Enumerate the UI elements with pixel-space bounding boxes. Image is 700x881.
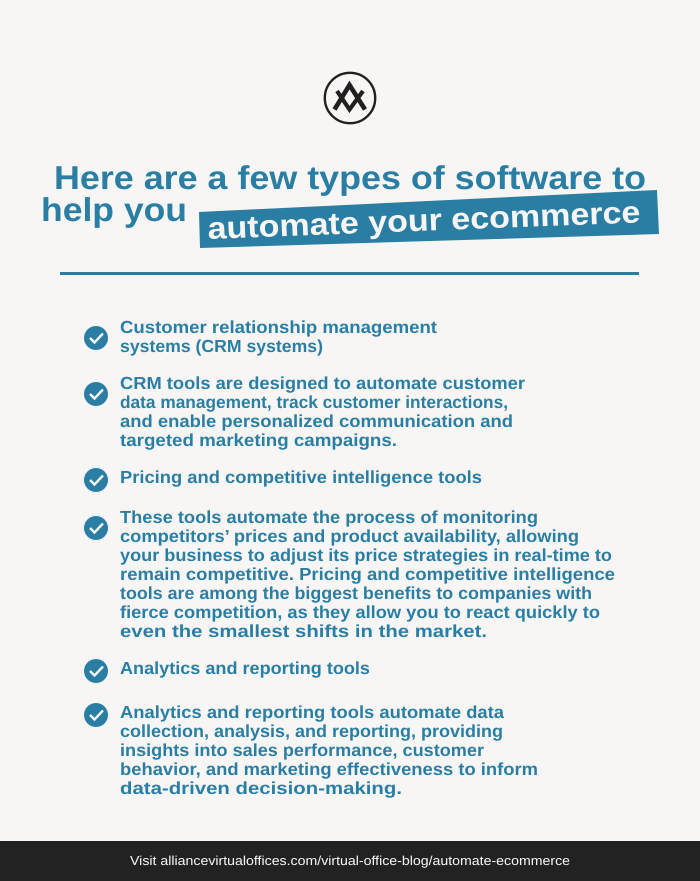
title — [41, 159, 646, 228]
icon: logo — [325, 73, 375, 123]
footer bar — [0, 841, 700, 881]
list item: pricing description: These tools automate the process of monitoring — [120, 507, 538, 527]
list item: pricing heading — [84, 467, 482, 492]
list item: CRM description: targeted marketing campaigns. — [120, 430, 397, 450]
list item: CRM description: CRM tools are designed to automate customer — [120, 373, 525, 393]
list item: analytics description: Analytics and reporting tools automate data — [120, 702, 504, 722]
list item: analytics description: insights into sales performance, customer — [120, 740, 484, 760]
list item: pricing description: your business to adjust its price strategies in real-time to — [120, 545, 612, 565]
list item: pricing heading: Pricing and competitive intelligence tools — [120, 467, 482, 487]
title: Here are a few types of software to — [54, 159, 646, 196]
list item: analytics description — [84, 702, 538, 798]
list item: analytics description: collection, analysis, and reporting, providing — [120, 721, 503, 741]
list item: CRM heading: Customer relationship management — [120, 317, 437, 337]
list item: analytics description: data-driven decision-making. — [120, 778, 402, 798]
list item: pricing description: competitors’ prices and product availability, allowing — [120, 526, 579, 546]
list item: CRM heading: systems (CRM systems) — [120, 336, 323, 356]
list item: CRM heading — [84, 317, 437, 356]
highlight banner: automate your ecommerce — [207, 194, 641, 246]
list item: pricing description — [84, 507, 615, 641]
footer bar: Visit alliancevirtualoffices.com/virtual-office-blog/automate-ecommerce — [130, 853, 570, 868]
list item: analytics description: behavior, and marketing effectiveness to inform — [120, 759, 538, 779]
list item: CRM description: data management, track customer interactions, — [120, 392, 508, 412]
list item: pricing description: tools are among the biggest benefits to companies with — [120, 583, 592, 603]
list item: CRM description: and enable personalized communication and — [120, 411, 513, 431]
title: help you — [41, 191, 187, 228]
list item: pricing description: remain competitive. Pricing and competitive intelligence — [120, 564, 615, 584]
list item: CRM description — [84, 373, 525, 450]
list item: analytics heading — [84, 658, 370, 683]
list item: analytics heading: Analytics and reporting tools — [120, 658, 370, 678]
list item: pricing description: even the smallest shifts in the market. — [120, 621, 487, 641]
list item: pricing description: fierce competition, as they allow you to react quickly to — [120, 602, 600, 622]
